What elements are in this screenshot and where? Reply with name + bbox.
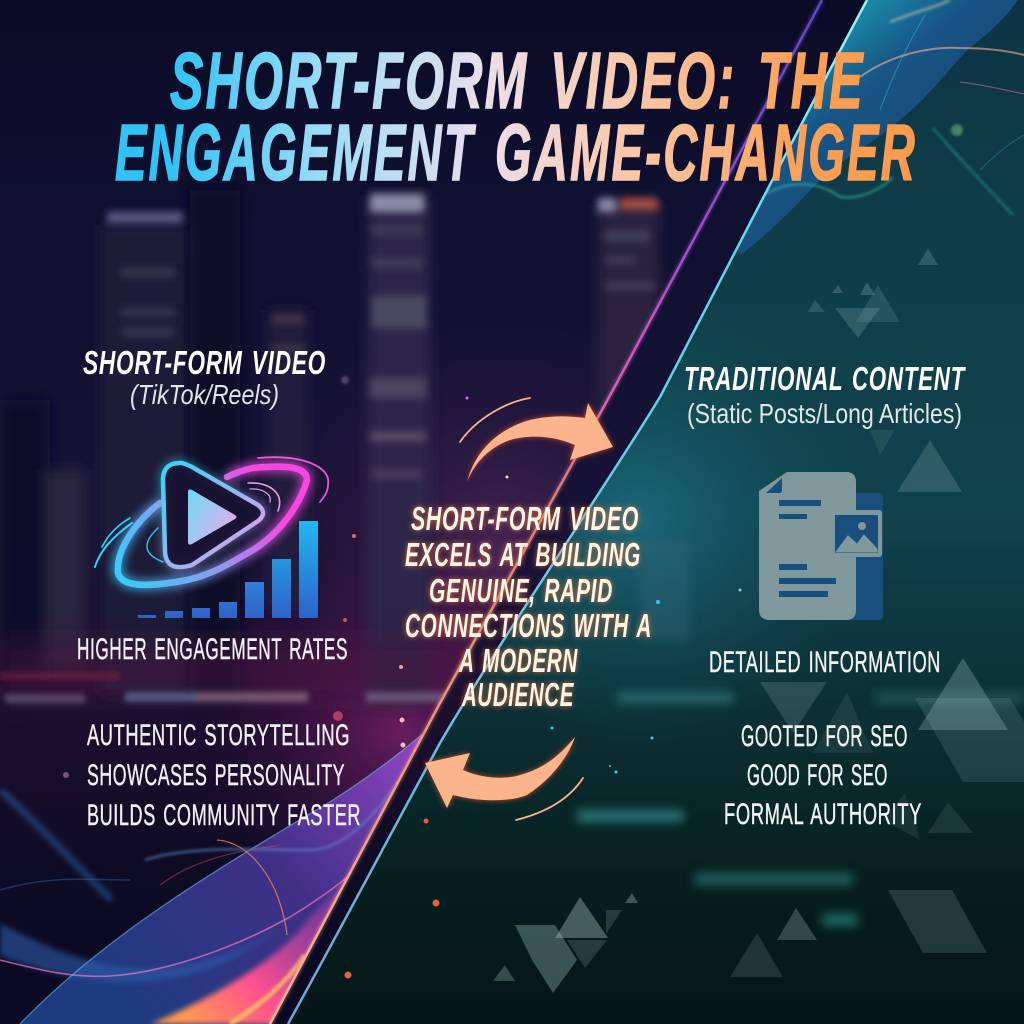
central callout: AUDIENCE: [461, 676, 574, 713]
arrow: bottom left-pointing: [425, 737, 583, 820]
arrow: top right-pointing: [460, 398, 613, 482]
central callout: CONNECTIONS WITH A: [405, 607, 652, 644]
left labels: AUTHENTIC STORYTELLING: [87, 719, 350, 752]
play triangle: [188, 489, 236, 545]
top right swooshes: [760, 0, 1024, 215]
blurred city left: [0, 188, 665, 832]
central callout: SHORT-FORM VIDEO: [411, 500, 639, 537]
right labels: [709, 646, 941, 831]
diagonal divider lines: [270, 0, 867, 1024]
right heading: (Static Posts/Long Articles): [687, 398, 962, 429]
particles: [63, 376, 742, 978]
icon: play button with orbit and bars: [95, 457, 328, 618]
central callout: SHORT-FORM VIDEO: [411, 500, 639, 537]
left labels: [77, 633, 361, 832]
right background panel: [290, 0, 1024, 1024]
left swooshes: [0, 733, 422, 1024]
left labels: HIGHER ENGAGEMENT RATES: [77, 633, 348, 666]
central callout: GENUINE, RAPID: [429, 572, 613, 609]
blue translucent band: [720, 0, 1018, 255]
central callout: GENUINE, RAPID: [429, 572, 613, 609]
left heading: [83, 344, 326, 410]
left heading: (TikTok/Reels): [130, 379, 279, 410]
icon glow: [118, 463, 307, 585]
icon: document with image: [759, 472, 883, 620]
orbit accents: [95, 457, 328, 567]
central callout: EXCELS AT BUILDING: [405, 536, 641, 573]
central callout: [405, 500, 652, 713]
central callout: A MODERN: [458, 642, 578, 679]
bars: [138, 521, 318, 618]
right labels: GOOD FOR SEO: [747, 759, 888, 792]
central callout: A MODERN: [458, 642, 578, 679]
right heading: [684, 360, 966, 429]
left labels: SHOWCASES PERSONALITY: [87, 759, 345, 792]
central callout: AUDIENCE: [461, 676, 574, 713]
triangle outline: [163, 463, 263, 567]
title: [115, 36, 917, 197]
decorative triangles: [493, 248, 1024, 993]
orbit ring: [118, 467, 307, 585]
blurred city lights right: [577, 540, 1024, 926]
left heading: SHORT-FORM VIDEO: [83, 344, 326, 381]
central callout: CONNECTIONS WITH A: [405, 607, 652, 644]
central callout: EXCELS AT BUILDING: [405, 536, 641, 573]
left labels: BUILDS COMMUNITY FASTER: [87, 799, 361, 832]
